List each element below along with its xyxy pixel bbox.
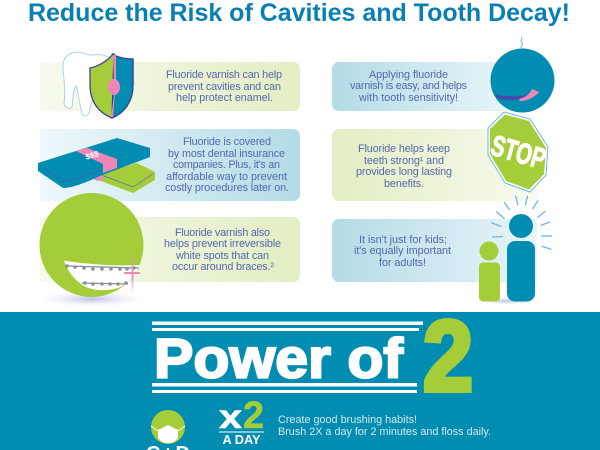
- icon: x2 a day: [219, 395, 264, 447]
- text: insurance: affordable way to prevent: [166, 171, 287, 183]
- panel: adults: [332, 196, 552, 306]
- panel: long lasting: [332, 112, 549, 201]
- icon: x2 a day: 2: [243, 395, 264, 437]
- heading: power of 2: [152, 300, 473, 412]
- icon: masked face: [151, 410, 185, 444]
- text: adults: [354, 234, 451, 269]
- text: easy application: varnish is easy, and helps: [350, 80, 468, 92]
- text: braces: occur around braces.²: [172, 261, 274, 273]
- text: adults: It isn't just for kids;: [359, 234, 447, 246]
- icon: smiling blue face: [490, 37, 554, 112]
- text: insurance: [165, 136, 289, 194]
- heading: power of 2: Power of: [154, 326, 403, 390]
- icon: adult and child: [471, 196, 552, 306]
- icon: x2 a day: A DAY: [222, 432, 261, 447]
- text: prevent cavities: Fluoride varnish can help: [166, 69, 282, 81]
- icon: x2 a day: x: [219, 398, 243, 435]
- text: long lasting: [356, 143, 452, 190]
- icon: money bundles: $$$: [84, 149, 100, 162]
- panel: power of 2: [0, 300, 600, 450]
- icon: smile with braces: [40, 193, 144, 297]
- text: braces: white spots that can: [175, 250, 269, 262]
- text: long lasting: provides long lasting: [356, 166, 452, 178]
- icon: tooth with shield: [63, 52, 133, 118]
- text: insurance: costly procedures later on.: [165, 182, 289, 194]
- text: insurance: companies. Plus, it's an: [173, 159, 280, 171]
- text: easy application: [350, 69, 468, 104]
- text: insurance: by most dental insurance: [168, 148, 285, 160]
- text: prevent cavities: help protect enamel.: [176, 92, 273, 104]
- text: long lasting: benefits.: [384, 178, 424, 190]
- icon: money bundles: [38, 138, 155, 193]
- text: long lasting: Fluoride helps keep: [358, 143, 450, 155]
- panel: insurance: [38, 129, 300, 201]
- text: adults: for adults!: [379, 257, 426, 269]
- icon: stop sign: [487, 112, 549, 192]
- text: easy application: Applying fluoride: [369, 69, 448, 81]
- text: braces: Fluoride varnish also: [175, 227, 270, 239]
- panel: prevent cavities: [40, 52, 300, 118]
- text: brushing habits: [278, 414, 491, 438]
- text: adults: it's equally important: [354, 245, 451, 257]
- panel: easy application: [332, 37, 554, 112]
- panel: braces: [32, 193, 300, 308]
- text: prevent cavities: [166, 69, 282, 104]
- heading: power of 2: 2: [423, 300, 473, 412]
- text: insurance: Fluoride is covered: [183, 136, 271, 148]
- icon: shadow: [32, 290, 152, 308]
- text: long lasting: teeth strong¹ and: [364, 155, 444, 167]
- text: prevent cavities: prevent cavities and can: [168, 81, 281, 93]
- text: braces: [164, 227, 281, 273]
- icon: stop sign: STOP: [487, 130, 549, 176]
- text: easy application: with tooth sensitivity!: [358, 92, 458, 104]
- text: braces: helps prevent irreversible: [164, 238, 281, 250]
- text: brushing habits: Brush 2X a day for 2 minutes and floss daily.: [278, 426, 491, 438]
- text: brushing habits: Create good brushing habits!: [278, 414, 417, 426]
